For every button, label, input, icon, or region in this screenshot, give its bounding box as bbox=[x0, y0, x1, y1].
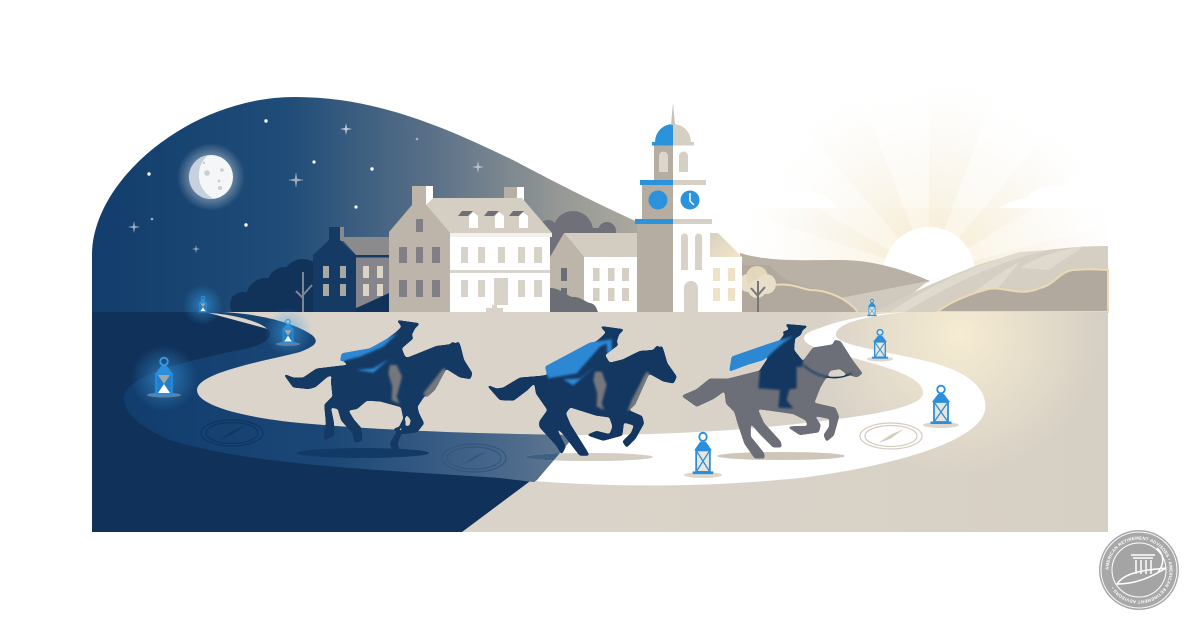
compass: night bbox=[201, 420, 263, 446]
rider leg 1 bbox=[388, 365, 402, 404]
ground shadows bbox=[297, 448, 845, 461]
middle house bbox=[550, 233, 660, 312]
dark bushes and tree: left bbox=[230, 259, 324, 318]
seal column icon bbox=[1117, 548, 1166, 584]
horse 1 bbox=[285, 342, 472, 454]
clouds bbox=[740, 168, 1108, 208]
lantern: dawn far bbox=[867, 299, 877, 316]
lantern: night far bbox=[183, 285, 223, 325]
lantern: dawn foreground bbox=[684, 433, 722, 478]
bushes behind centre bbox=[539, 211, 616, 258]
rider body 3 bbox=[758, 324, 808, 408]
company seal bbox=[1099, 530, 1179, 610]
compass: twilight bbox=[442, 444, 506, 472]
tree: right of tower bbox=[739, 266, 776, 312]
horse 2 bbox=[488, 346, 676, 455]
horse 3 bbox=[683, 341, 862, 458]
moon bbox=[177, 143, 245, 211]
lantern: dawn right bbox=[923, 386, 959, 428]
rider body 2 bbox=[550, 326, 624, 378]
cape 3 bbox=[729, 336, 793, 372]
back hills bbox=[740, 246, 1108, 312]
sunrise rays bbox=[784, 129, 1080, 266]
lantern: night middle bbox=[264, 308, 312, 356]
navy house bbox=[313, 227, 389, 312]
winding road: dawn section bbox=[536, 312, 986, 486]
horse 2 chest highlight bbox=[627, 372, 649, 412]
reins 3 bbox=[803, 365, 852, 378]
cape 2 bbox=[545, 339, 612, 385]
ground bbox=[92, 312, 1108, 532]
rider 2 bbox=[488, 326, 676, 455]
rider body 1 bbox=[343, 320, 420, 370]
front bushes bbox=[742, 265, 1108, 312]
horse 1 chest highlight bbox=[423, 368, 446, 397]
stars bbox=[128, 119, 484, 253]
clock tower bbox=[635, 103, 712, 312]
winding road: night section bbox=[124, 312, 570, 482]
dark night ground bbox=[92, 312, 537, 532]
rider 3 bbox=[683, 324, 862, 458]
lantern: night near bbox=[131, 345, 197, 411]
rider leg 2 bbox=[593, 372, 607, 410]
rider 1 bbox=[285, 320, 472, 454]
seal ring text: AMERICAN RETIREMENT ADVISORS • AMERICAN RETIREMENT ADVISORS • bbox=[1106, 536, 1172, 604]
lantern: dawn upper bbox=[867, 330, 893, 362]
large manor house bbox=[389, 186, 552, 312]
night sky bbox=[92, 97, 642, 312]
right wing building bbox=[710, 233, 742, 312]
cape 1 bbox=[340, 333, 398, 373]
rising sun bbox=[883, 227, 975, 319]
compass: dawn bbox=[860, 423, 922, 449]
